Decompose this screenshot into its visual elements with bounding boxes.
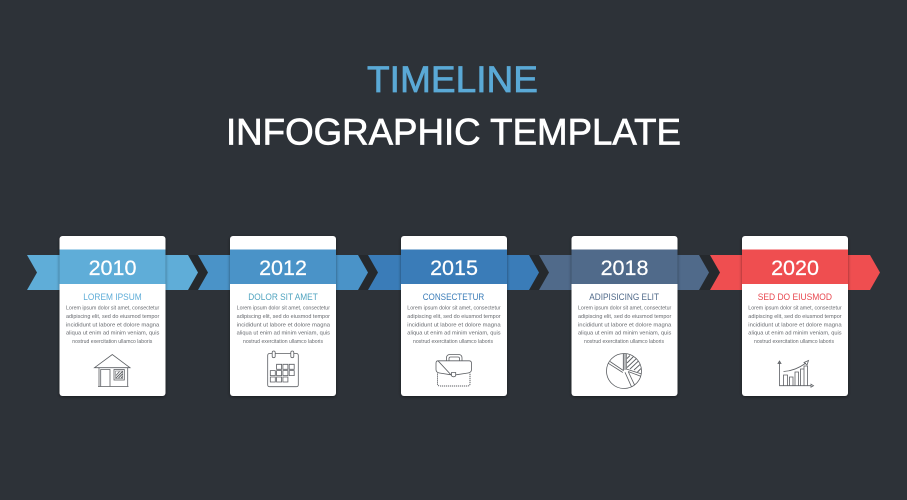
body text: aliqua ut enim ad minim veniam, quis bbox=[748, 331, 842, 337]
year: 2010 bbox=[89, 256, 136, 280]
body text: aliqua ut enim ad minim veniam, quis bbox=[407, 331, 501, 337]
body text: nostrud exercitation ullamco laboris bbox=[754, 339, 835, 345]
card heading: LOREM IPSUM bbox=[83, 292, 142, 302]
year: 2012 bbox=[259, 256, 307, 280]
body text: incididunt ut labore et dolore magna bbox=[407, 322, 501, 328]
body text: nostrud exercitation ullamco laboris bbox=[72, 339, 153, 345]
card heading: ADIPISICING ELIT bbox=[589, 292, 660, 302]
body text: Lorem ipsum dolor sit amet, consectetur bbox=[407, 306, 501, 312]
year: 2018 bbox=[601, 256, 648, 280]
body text: aliqua ut enim ad minim veniam, quis bbox=[578, 331, 672, 337]
body text: aliqua ut enim ad minim veniam, quis bbox=[66, 331, 160, 337]
panel: 2018 bbox=[572, 236, 678, 396]
year: 2015 bbox=[430, 256, 478, 280]
arrow ribbon: 2015 bbox=[368, 255, 539, 290]
body text: Lorem ipsum dolor sit amet, consectetur bbox=[66, 306, 160, 312]
body text: nostrud exercitation ullamco laboris bbox=[413, 339, 494, 345]
body text: incididunt ut labore et dolore magna bbox=[237, 322, 330, 328]
heading: infographic template: INFOGRAPHIC TEMPLATE bbox=[226, 112, 681, 152]
body text bbox=[407, 306, 501, 345]
body text: adipiscing elit, sed do eiusmod tempor bbox=[578, 314, 672, 320]
card heading: DOLOR SIT AMET bbox=[248, 292, 318, 302]
arrow ribbon: 2018 bbox=[539, 255, 709, 290]
card background bbox=[401, 236, 507, 396]
icon: briefcase bbox=[436, 354, 472, 386]
arrow ribbon: 2012 bbox=[198, 255, 368, 290]
title bbox=[226, 59, 681, 152]
body text: adipiscing elit, sed do eiusmod tempor bbox=[748, 314, 842, 320]
body text: Lorem ipsum dolor sit amet, consectetur bbox=[237, 306, 330, 312]
body text: adipiscing elit, sed do eiusmod tempor bbox=[66, 314, 160, 320]
body text: nostrud exercitation ullamco laboris bbox=[584, 339, 665, 345]
icon: growth chart bbox=[778, 360, 814, 387]
body text: Lorem ipsum dolor sit amet, consectetur bbox=[578, 306, 672, 312]
body text: incididunt ut labore et dolore magna bbox=[66, 322, 160, 328]
body text: Lorem ipsum dolor sit amet, consectetur bbox=[748, 306, 842, 312]
panel: 2012 bbox=[230, 236, 336, 396]
icon: pie chart bbox=[606, 354, 642, 388]
body text: incididunt ut labore et dolore magna bbox=[578, 322, 672, 328]
card background bbox=[230, 236, 336, 396]
icon: calendar bbox=[268, 351, 298, 387]
card heading: CONSECTETUR bbox=[423, 292, 484, 302]
body text: adipiscing elit, sed do eiusmod tempor bbox=[237, 314, 330, 320]
heading: timeline: TIMELINE bbox=[367, 59, 538, 100]
panel: 2010 bbox=[60, 236, 166, 396]
body text: aliqua ut enim ad minim veniam, quis bbox=[237, 331, 331, 337]
year band bbox=[60, 250, 166, 284]
card background bbox=[572, 236, 678, 396]
body text: incididunt ut labore et dolore magna bbox=[748, 322, 842, 328]
body text bbox=[578, 306, 672, 345]
year band bbox=[572, 250, 678, 284]
year band bbox=[742, 250, 848, 284]
card background bbox=[742, 236, 848, 396]
panel: 2020 bbox=[742, 236, 848, 396]
year band bbox=[401, 250, 507, 284]
icon: house bbox=[94, 354, 130, 386]
arrow ribbon: 2010 bbox=[27, 255, 198, 290]
year: 2020 bbox=[771, 256, 819, 280]
body text: adipiscing elit, sed do eiusmod tempor bbox=[407, 314, 501, 320]
body text bbox=[66, 306, 160, 345]
body text: nostrud exercitation ullamco laboris bbox=[243, 339, 324, 345]
panel: 2015 bbox=[401, 236, 507, 396]
dark chevron separators bbox=[188, 255, 720, 290]
body text bbox=[748, 306, 842, 345]
card heading: SED DO EIUSMOD bbox=[758, 292, 832, 302]
year band bbox=[230, 250, 336, 284]
arrow ribbon: 2020 bbox=[710, 255, 880, 290]
body text bbox=[237, 306, 331, 345]
card background bbox=[60, 236, 166, 396]
